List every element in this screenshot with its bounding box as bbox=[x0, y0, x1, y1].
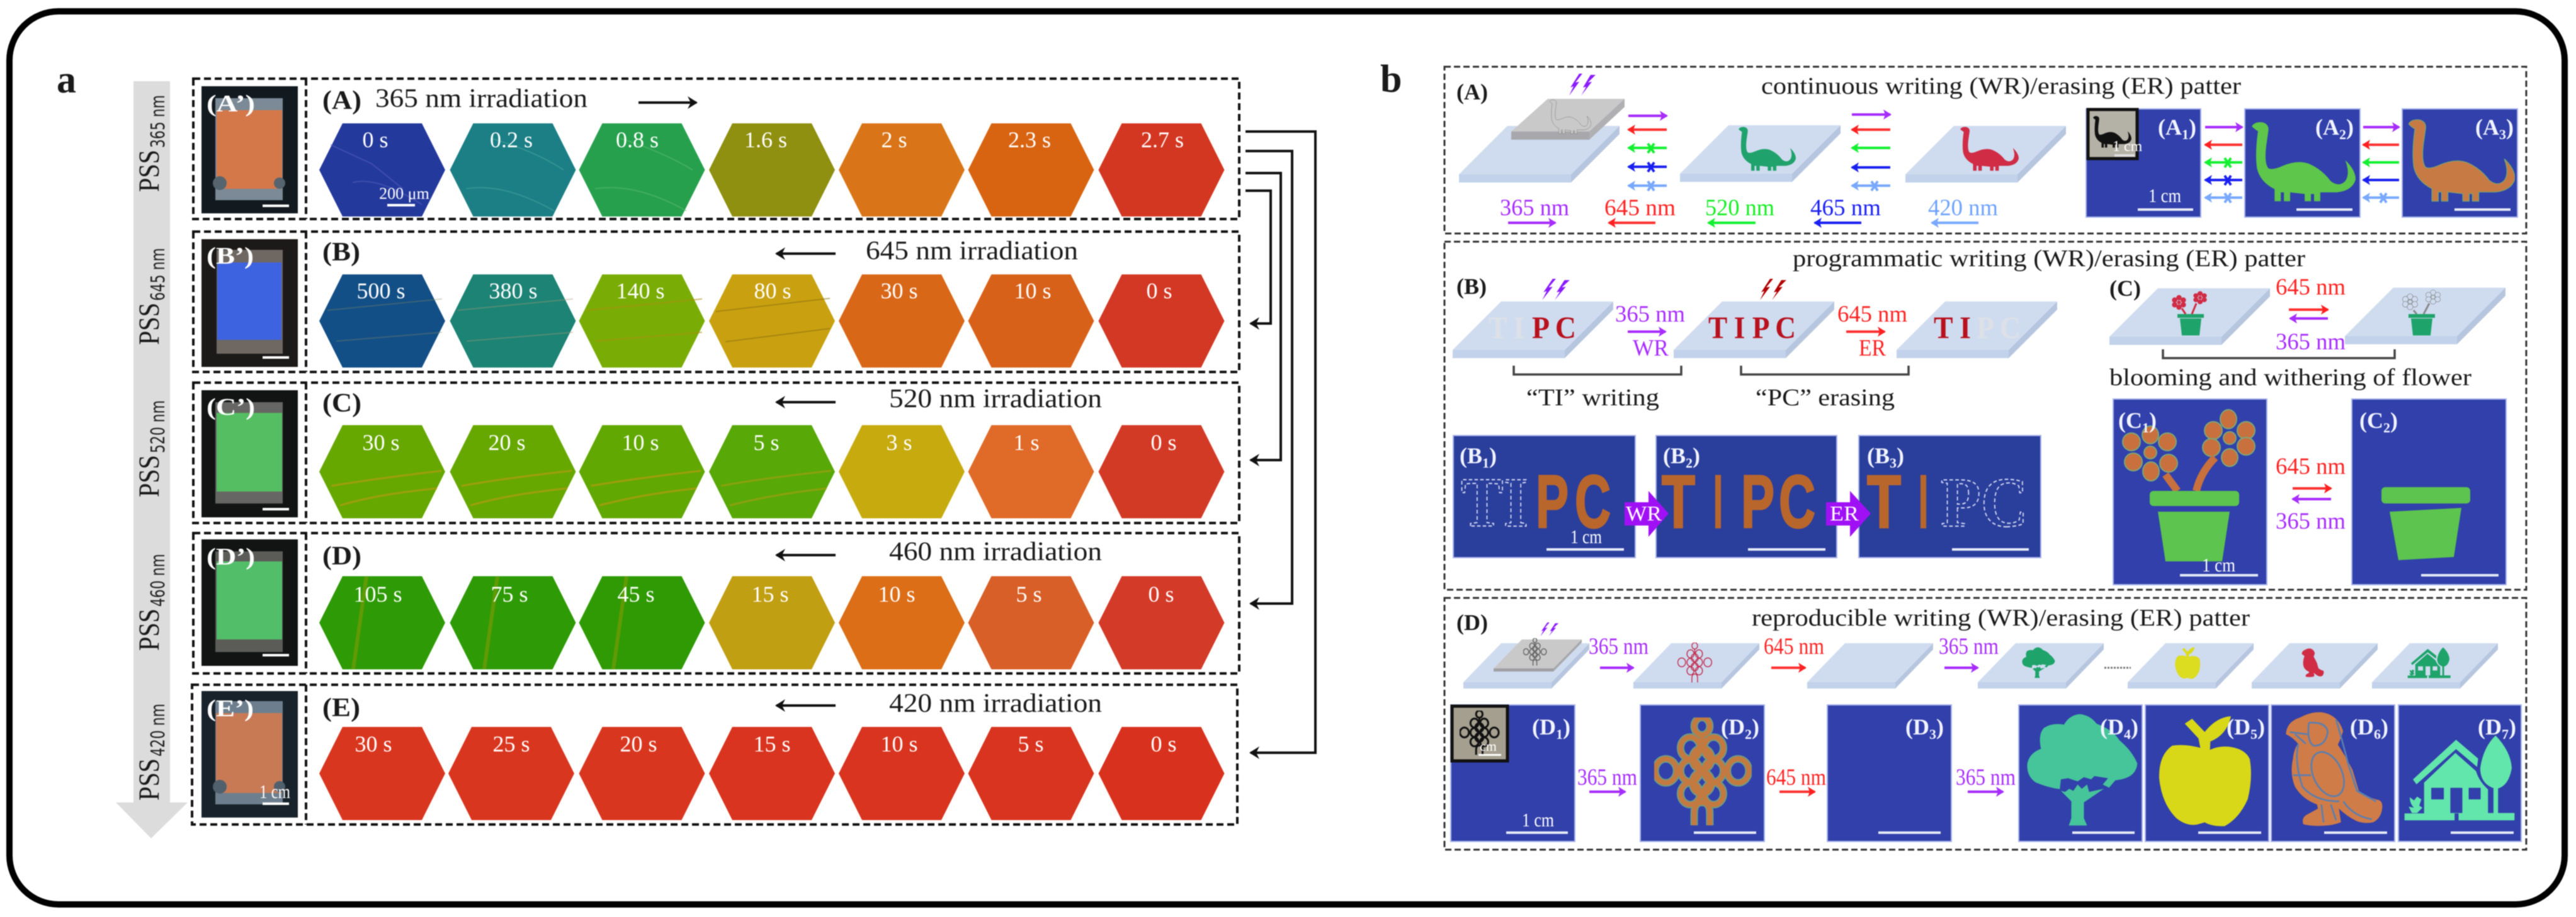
heading: 520 nm irradiation: 520 nm irradiation bbox=[889, 385, 1102, 413]
photo A1: ) bbox=[2189, 115, 2196, 140]
photo A' bbox=[201, 86, 298, 213]
photo C1: 1 bbox=[2142, 420, 2149, 436]
arrow: 645 nm ER bbox=[1837, 301, 1907, 361]
hexagons: 460 nm series: 105 s bbox=[353, 582, 402, 607]
hexagons: 460 nm series: 10 s bbox=[878, 582, 916, 607]
schematic: TI faint, PC written: P C bbox=[1532, 310, 1576, 345]
legend: wavelengths bbox=[1500, 195, 1998, 223]
block arrow: ER: ER bbox=[1830, 502, 1859, 526]
schematic: blooming flower bbox=[2109, 288, 2270, 345]
photo B2: 2 bbox=[1686, 455, 1693, 471]
photo D5 apple: 5 bbox=[2250, 726, 2257, 742]
arrows between slabs 2 and 3 bbox=[1852, 115, 1890, 191]
panel a label: a bbox=[57, 59, 76, 101]
arrows: 645 nm / 365 nm between photos: 365 nm bbox=[2276, 509, 2346, 534]
heading: 365 nm irradiation bbox=[322, 84, 696, 115]
photo C': (C’) bbox=[207, 394, 255, 420]
block arrow: WR: WR bbox=[1626, 502, 1662, 526]
photo B3 bbox=[1859, 436, 2041, 558]
schematic: masked slab bbox=[1459, 74, 1625, 183]
hexagons: 520 nm series: 0 s bbox=[1150, 430, 1177, 455]
schematic: withered flower bbox=[2345, 288, 2505, 344]
arrow: 645 nm ER: ER bbox=[1859, 335, 1886, 361]
arrow: 365 nm photos second: 365 nm bbox=[1956, 765, 2016, 790]
photo D': (D’) bbox=[207, 544, 255, 570]
photo B1: 1 cm bbox=[1570, 526, 1602, 548]
hexagons: 520 nm series: 5 s bbox=[753, 430, 780, 455]
hexagons: 365 nm series: 1.6 s bbox=[744, 127, 787, 152]
arrow: 365 nm bbox=[1589, 634, 1648, 668]
hexagons: 460 nm series: 15 s bbox=[751, 582, 789, 607]
hexagons: 420 nm series: 20 s bbox=[620, 731, 657, 757]
photo C1 bbox=[2113, 399, 2267, 585]
legend: wavelengths: 645 nm bbox=[1604, 195, 1676, 221]
photo B3: T bbox=[1867, 460, 1901, 544]
photo B': (B’) bbox=[207, 243, 254, 269]
arrow: PSS progression bbox=[116, 81, 188, 838]
panel: reproducible writing: (D) bbox=[1456, 610, 1488, 635]
axis labels: PSS wavelengths: PSS bbox=[133, 150, 166, 192]
photo D3: (D bbox=[1905, 714, 1929, 740]
axis labels: PSS wavelengths: 645 nm bbox=[147, 248, 169, 301]
hexagons: 365 nm series bbox=[319, 123, 1224, 217]
schematic: green dinosaur slab bbox=[1680, 125, 1841, 182]
photo D1 bbox=[1451, 705, 1575, 841]
hexagons: 460 nm series: 0 s bbox=[1148, 582, 1174, 607]
photo B3: 3 bbox=[1890, 455, 1897, 471]
photo D4 tree: 4 bbox=[2124, 726, 2131, 742]
photo B2: I bbox=[1713, 460, 1723, 544]
photo B1: C bbox=[1575, 460, 1611, 544]
hexagons: 365 nm series: 2.3 s bbox=[1008, 127, 1051, 152]
arrow: 645 nm ER: 645 nm bbox=[1837, 301, 1907, 327]
panel: row D 460 nm bbox=[193, 533, 1239, 673]
hexagons: 645 nm series: 30 s bbox=[880, 278, 918, 303]
hexagons: 460 nm series: 5 s bbox=[1016, 582, 1042, 607]
panel: programmatic writing bbox=[1444, 242, 2526, 590]
photo D6 parrot: ) bbox=[2381, 714, 2388, 740]
arrows between slabs 1 and 2 bbox=[1628, 116, 1667, 191]
schematic: blank slab bbox=[1807, 643, 1933, 689]
heading: 520 nm irradiation bbox=[322, 385, 1102, 418]
photo D4 tree bbox=[2019, 705, 2142, 841]
heading: 365 nm irradiation: (A) bbox=[322, 86, 361, 115]
heading: 460 nm irradiation: 460 nm irradiation bbox=[889, 537, 1102, 566]
hexagons: 420 nm series: 0 s bbox=[1150, 731, 1177, 757]
heading: 520 nm irradiation: (C) bbox=[322, 389, 361, 418]
panel: row A 365 nm bbox=[193, 79, 1239, 219]
arrows: 645 nm / 365 nm between photos: 645 nm bbox=[2276, 454, 2346, 480]
heading: 420 nm irradiation: 420 nm irradiation bbox=[889, 689, 1102, 718]
schematic: house slab bbox=[2372, 643, 2498, 689]
photo D5 apple: ) bbox=[2257, 714, 2265, 740]
photo D2 bbox=[1640, 705, 1764, 841]
hexagons: 420 nm series: 30 s bbox=[355, 731, 392, 757]
photo D6 parrot: 6 bbox=[2374, 726, 2381, 742]
photo D7 house: ) bbox=[2509, 714, 2516, 740]
heading: 645 nm irradiation: 645 nm irradiation bbox=[866, 237, 1078, 266]
arrow: 365 nm second: 365 nm bbox=[1939, 634, 1999, 660]
arrow: 365 nm WR: WR bbox=[1633, 335, 1669, 361]
schematic: TI faint, PC written bbox=[1453, 279, 1613, 358]
photo C' bbox=[201, 390, 298, 517]
photo A3 bbox=[2402, 109, 2517, 217]
photo D4 tree: (D bbox=[2100, 714, 2124, 740]
hexagons: 365 nm series: 0 s bbox=[362, 127, 389, 152]
photo D7 house: 7 bbox=[2502, 726, 2509, 742]
photo B3: PC bbox=[1941, 464, 2028, 542]
photo D1: 1 bbox=[1556, 726, 1563, 742]
photo A2 bbox=[2245, 109, 2360, 217]
axis labels: PSS wavelengths bbox=[133, 95, 169, 801]
hexagons: 645 nm series: 380 s bbox=[489, 278, 538, 303]
arrow: 365 nm: 365 nm bbox=[1589, 634, 1648, 660]
panel: programmatic writing: (C) bbox=[2109, 276, 2141, 301]
photo B1 bbox=[1453, 436, 1635, 558]
photo A1: 1 cm bbox=[2148, 184, 2181, 206]
hexagons: 460 nm series: 75 s bbox=[491, 582, 528, 607]
photo D3: ) bbox=[1936, 714, 1944, 740]
photo D3: 3 bbox=[1929, 726, 1936, 742]
photo D4 tree: ) bbox=[2131, 714, 2138, 740]
photo B1: TI bbox=[1461, 464, 1528, 542]
schematic: TI written, PC faint: T I bbox=[1934, 310, 1971, 345]
hexagons: 420 nm series bbox=[319, 727, 1224, 820]
arrow: 645 nm: 645 nm bbox=[1764, 634, 1824, 660]
axis labels: PSS wavelengths: 365 nm bbox=[147, 95, 169, 148]
arrow: 645 nm photos: 645 nm bbox=[1766, 765, 1826, 790]
photo D6 parrot: (D bbox=[2350, 714, 2374, 740]
hexagons: 460 nm series: 45 s bbox=[617, 582, 655, 607]
heading: 420 nm irradiation bbox=[322, 689, 1102, 723]
photo C1: 1 cm bbox=[2202, 554, 2235, 576]
hexagons: 420 nm series: 25 s bbox=[492, 731, 530, 757]
legend: wavelengths: 465 nm bbox=[1810, 195, 1881, 221]
photo D5 apple bbox=[2145, 705, 2269, 841]
arrows: 645 nm / 365 nm top bbox=[2276, 274, 2346, 355]
schematic: apple slab bbox=[2128, 643, 2254, 689]
heading: 365 nm irradiation: 365 nm irradiation bbox=[375, 84, 587, 113]
arrows: 645 nm / 365 nm top: 365 nm bbox=[2276, 329, 2346, 355]
schematic: TIPC bbox=[1674, 279, 1834, 358]
arrows: 645 nm / 365 nm top: 645 nm bbox=[2276, 274, 2346, 300]
schematic: masked slab bbox=[1463, 622, 1589, 689]
photo C2: (C bbox=[2359, 408, 2383, 433]
schematic: red dinosaur slab bbox=[1905, 126, 2066, 183]
panel: continuous writing bbox=[1444, 67, 2526, 233]
panel b label: b bbox=[1380, 58, 1402, 101]
schematic: TI faint, PC written: T I bbox=[1489, 310, 1524, 345]
hexagons: 520 nm series: 1 s bbox=[1013, 430, 1040, 455]
photo B3: (B bbox=[1867, 443, 1890, 468]
hexagons: 645 nm series bbox=[319, 274, 1224, 368]
photo B2: C bbox=[1779, 460, 1815, 544]
photo D3 bbox=[1827, 705, 1951, 841]
axis labels: PSS wavelengths: PSS bbox=[133, 609, 166, 651]
legend: wavelengths: 520 nm bbox=[1705, 195, 1774, 221]
photo B2: P bbox=[1741, 460, 1774, 544]
hexagons: 365 nm series: 2 s bbox=[881, 127, 907, 152]
hexagons: 365 nm series: 200 μm bbox=[379, 184, 429, 203]
heading: 460 nm irradiation: (D) bbox=[322, 542, 361, 571]
arrows A1 to A2 bbox=[2205, 127, 2242, 203]
panel: row C 520 nm bbox=[193, 383, 1239, 523]
legend: wavelengths: 365 nm bbox=[1500, 195, 1569, 221]
arrow: 645 nm bbox=[1764, 634, 1824, 668]
photo A1: 1 cm bbox=[2113, 138, 2143, 155]
connector arrows from row A to rows B-E bbox=[1245, 132, 1315, 753]
photo E': 1 cm bbox=[259, 780, 290, 802]
photo A3: (A bbox=[2475, 115, 2499, 140]
axis labels: PSS wavelengths: PSS bbox=[133, 303, 166, 345]
arrows A2 to A3 bbox=[2363, 127, 2399, 203]
photo A2: 2 bbox=[2339, 127, 2346, 142]
caption: blooming and withering: blooming and withering of flower bbox=[2109, 364, 2471, 391]
photo B3: ) bbox=[1897, 443, 1904, 468]
panel: row B 645 nm bbox=[193, 232, 1239, 372]
photo A2: ) bbox=[2346, 115, 2354, 140]
photo C2: ) bbox=[2390, 408, 2398, 433]
hexagons: 645 nm series: 140 s bbox=[616, 278, 665, 303]
photo B' bbox=[201, 239, 298, 367]
dots bbox=[2104, 667, 2131, 668]
block arrow: WR bbox=[1625, 491, 1669, 537]
heading: 645 nm irradiation bbox=[322, 237, 1078, 267]
legend: wavelengths: 420 nm bbox=[1928, 195, 1998, 221]
title: continuous writing (WR)/erasing (ER) patter bbox=[1761, 73, 2241, 99]
arrow: 365 nm WR bbox=[1615, 301, 1685, 361]
photo D2: ) bbox=[1752, 714, 1759, 740]
hexagons: 460 nm series bbox=[319, 577, 1224, 670]
photo C2 bbox=[2352, 399, 2506, 585]
panel: continuous writing: (A) bbox=[1456, 79, 1488, 104]
caption: blooming and withering bbox=[2109, 349, 2471, 391]
photo B1: (B bbox=[1460, 443, 1482, 468]
axis labels: PSS wavelengths: 520 nm bbox=[147, 400, 169, 453]
photo B2 bbox=[1656, 436, 1837, 558]
hexagons: 420 nm series: 5 s bbox=[1018, 731, 1044, 757]
hexagons: 520 nm series: 20 s bbox=[488, 430, 526, 455]
hexagons: 645 nm series: 500 s bbox=[356, 278, 406, 303]
schematic: bird slab bbox=[2252, 643, 2378, 689]
photo B2: T bbox=[1662, 460, 1695, 544]
arrow: 365 nm WR: 365 nm bbox=[1615, 301, 1685, 327]
panel: reproducible writing bbox=[1444, 598, 2526, 850]
photo E': (E’) bbox=[207, 695, 254, 722]
hexagons: 420 nm series: 10 s bbox=[880, 731, 918, 757]
panel: programmatic writing: (B) bbox=[1456, 274, 1487, 299]
axis labels: PSS wavelengths: PSS bbox=[133, 758, 166, 801]
caption: PC erasing: “PC” erasing bbox=[1756, 385, 1895, 411]
photo B1: ) bbox=[1489, 443, 1497, 468]
axis labels: PSS wavelengths: 460 nm bbox=[147, 554, 169, 607]
hexagons: 520 nm series: 3 s bbox=[886, 430, 912, 455]
photo D1: 1 cm bbox=[1522, 809, 1554, 831]
photo D7 house bbox=[2398, 705, 2521, 841]
photo D1: (D bbox=[1532, 714, 1556, 740]
photo A1: (A bbox=[2158, 115, 2182, 140]
photo C2: 2 bbox=[2383, 420, 2390, 436]
schematic: TI written, PC faint bbox=[1897, 301, 2057, 358]
photo D2: (D bbox=[1721, 714, 1745, 740]
caption: PC erasing bbox=[1741, 366, 1909, 411]
schematic: TIPC: T I P C bbox=[1708, 310, 1796, 345]
photo D1: cm bbox=[1480, 738, 1497, 754]
schematic: knot slab bbox=[1633, 643, 1759, 689]
photo A1: 1 bbox=[2182, 127, 2189, 142]
photo D' bbox=[201, 539, 298, 666]
photo A3: 3 bbox=[2499, 127, 2506, 142]
hexagons: 645 nm series: 80 s bbox=[754, 278, 792, 303]
axis labels: PSS wavelengths: 420 nm bbox=[147, 704, 169, 757]
arrow: 365 nm second bbox=[1939, 634, 1999, 668]
hexagons: 520 nm series: 30 s bbox=[362, 430, 400, 455]
photo A1 bbox=[2086, 109, 2201, 217]
photo A': (A’) bbox=[207, 91, 255, 117]
hexagons: 645 nm series: 0 s bbox=[1146, 278, 1172, 303]
hexagons: 365 nm series: 0.8 s bbox=[616, 127, 659, 152]
heading: 645 nm irradiation: (B) bbox=[322, 238, 360, 267]
photo D5 apple: (D bbox=[2227, 714, 2250, 740]
photo A3: ) bbox=[2506, 115, 2514, 140]
hexagons: 520 nm series bbox=[319, 425, 1224, 519]
photo E' bbox=[201, 691, 298, 818]
block arrow: ER bbox=[1826, 491, 1871, 537]
photo D2: 2 bbox=[1745, 726, 1752, 742]
axis labels: PSS wavelengths: PSS bbox=[133, 455, 166, 497]
photo B1: P bbox=[1536, 460, 1569, 544]
photo C1: ) bbox=[2149, 408, 2157, 433]
photo B1: 1 bbox=[1482, 455, 1489, 471]
photo B2: (B bbox=[1663, 443, 1686, 468]
title: reproducible writing (WR)/erasing (ER) patter bbox=[1752, 605, 2250, 631]
photo D1: ) bbox=[1563, 714, 1570, 740]
photo A2: (A bbox=[2315, 115, 2339, 140]
hexagons: 365 nm series: 0.2 s bbox=[490, 127, 533, 152]
caption: TI writing: “TI” writing bbox=[1526, 385, 1659, 411]
heading: 460 nm irradiation bbox=[322, 537, 1102, 571]
title: programmatic writing (WR)/erasing (ER) patter bbox=[1793, 245, 2305, 272]
panel: row E 420 nm bbox=[192, 685, 1237, 824]
arrow: 365 nm photos: 365 nm bbox=[1577, 765, 1637, 790]
hexagons: 365 nm series: 2.7 s bbox=[1141, 127, 1184, 152]
hexagons: 520 nm series: 10 s bbox=[621, 430, 659, 455]
photo D6 parrot bbox=[2271, 705, 2395, 841]
heading: 420 nm irradiation: (E) bbox=[322, 694, 360, 723]
photo B3: I bbox=[1919, 460, 1928, 544]
caption: TI writing bbox=[1514, 366, 1681, 411]
arrows: 645 nm / 365 nm between photos bbox=[2276, 454, 2346, 534]
schematic: tree slab bbox=[1978, 643, 2104, 689]
schematic: TI written, PC faint: P C bbox=[1977, 310, 2021, 345]
hexagons: 420 nm series: 15 s bbox=[753, 731, 791, 757]
photo D7 house: (D bbox=[2478, 714, 2502, 740]
photo C1: (C bbox=[2118, 408, 2142, 433]
hexagons: 645 nm series: 10 s bbox=[1014, 278, 1052, 303]
photo B2: ) bbox=[1693, 443, 1700, 468]
